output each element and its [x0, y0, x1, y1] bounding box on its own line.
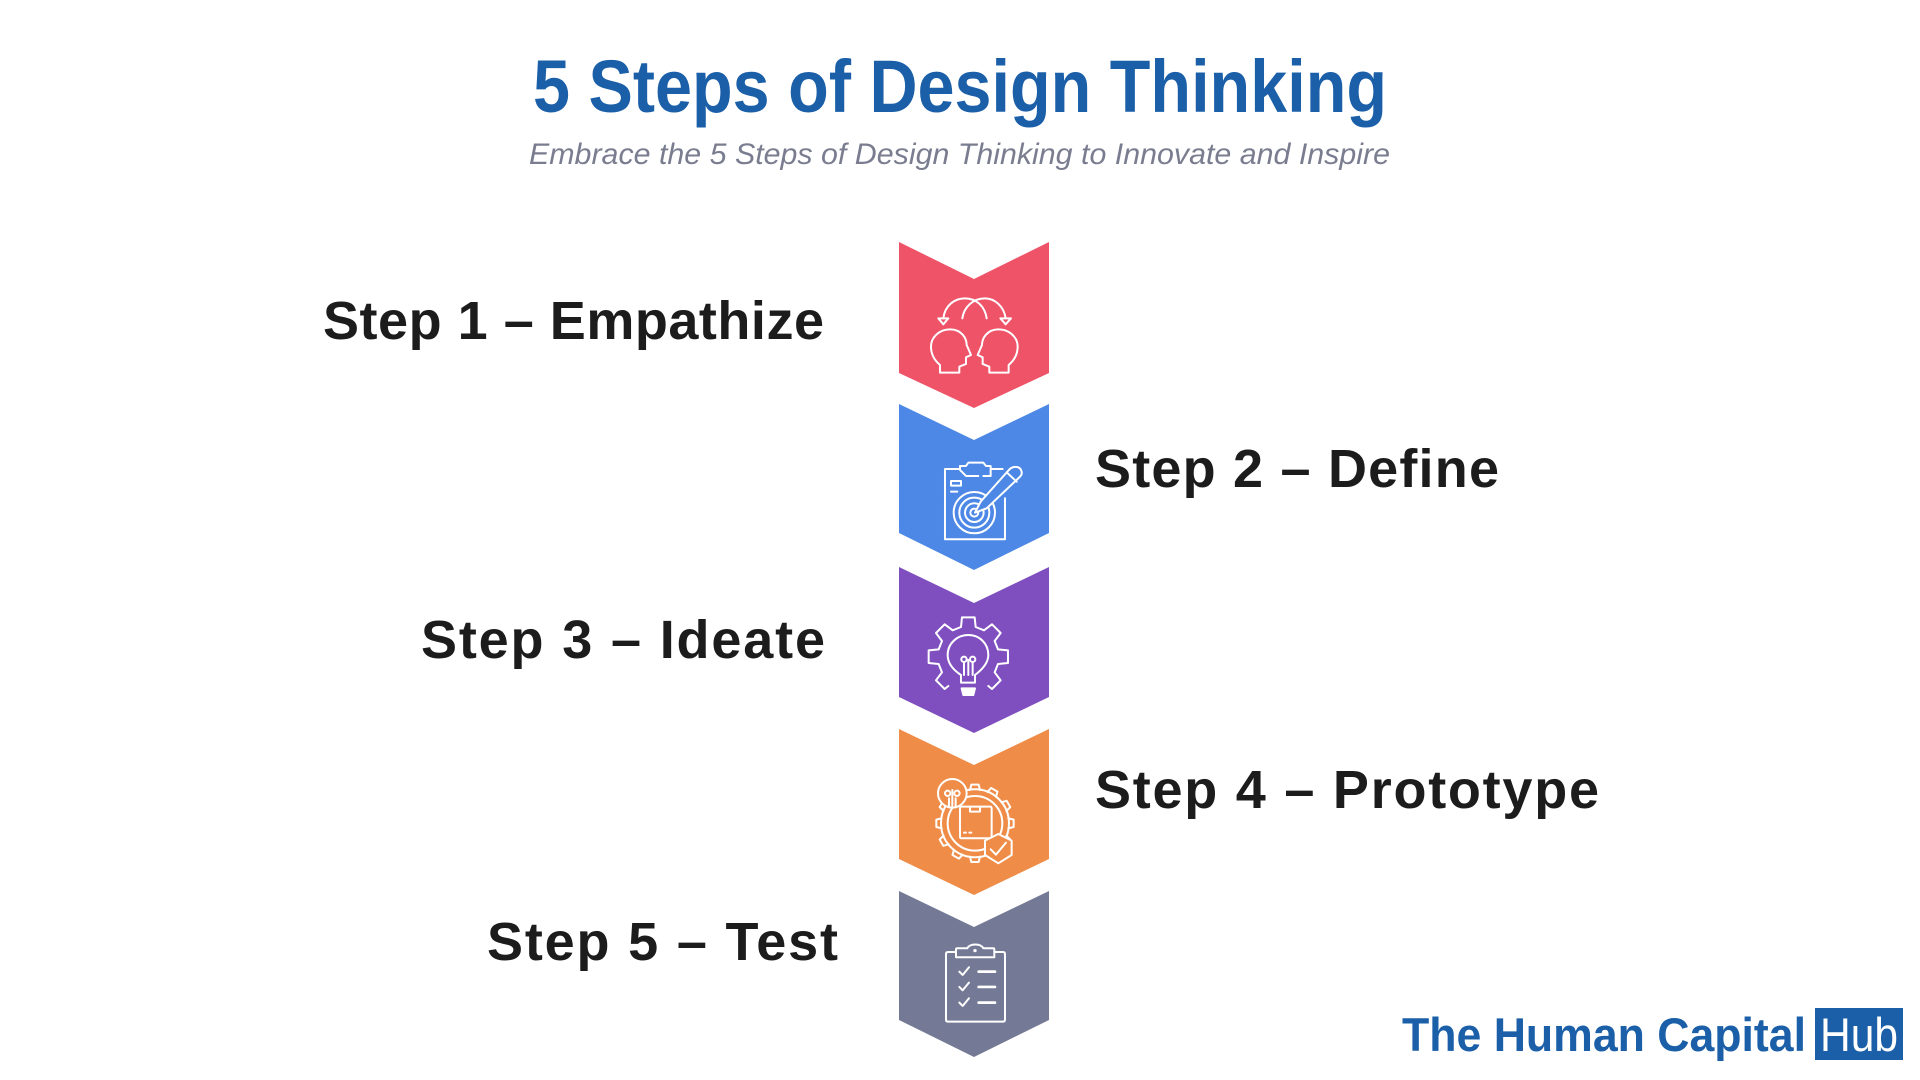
- icon: clipboard with target and pencil: [945, 463, 1022, 539]
- icon: gear with light bulb: [929, 617, 1008, 695]
- chevron 5: slate: [899, 891, 1049, 1057]
- chevron 1: red: [899, 242, 1049, 408]
- logo: The Human Capital Hub: Hub: [1820, 1008, 1898, 1061]
- step 3 label: Step 3 – Ideate: [421, 610, 825, 670]
- icon: checklist clipboard: [946, 945, 1005, 1022]
- chevron 4: orange: [899, 729, 1049, 895]
- chevron 3: purple: [899, 567, 1049, 733]
- step 4 label: Step 4 – Prototype: [1095, 760, 1599, 820]
- step 1 label: Step 1 – Empathize: [323, 291, 824, 351]
- chevron 2: blue: [899, 404, 1049, 570]
- logo: The Human Capital Hub: The Human Capital: [1402, 1008, 1806, 1061]
- step 2 label: Step 2 – Define: [1095, 439, 1499, 499]
- icon: two heads exchanging ideas: [931, 298, 1018, 373]
- subtitle: Embrace the 5 Steps of Design Thinking to Innovate and Inspire: [529, 138, 1390, 171]
- step 5 label: Step 5 – Test: [487, 912, 838, 972]
- icon: prototype gear with box, bulb and shield: [936, 779, 1014, 863]
- title: 5 Steps of Design Thinking: [533, 45, 1387, 128]
